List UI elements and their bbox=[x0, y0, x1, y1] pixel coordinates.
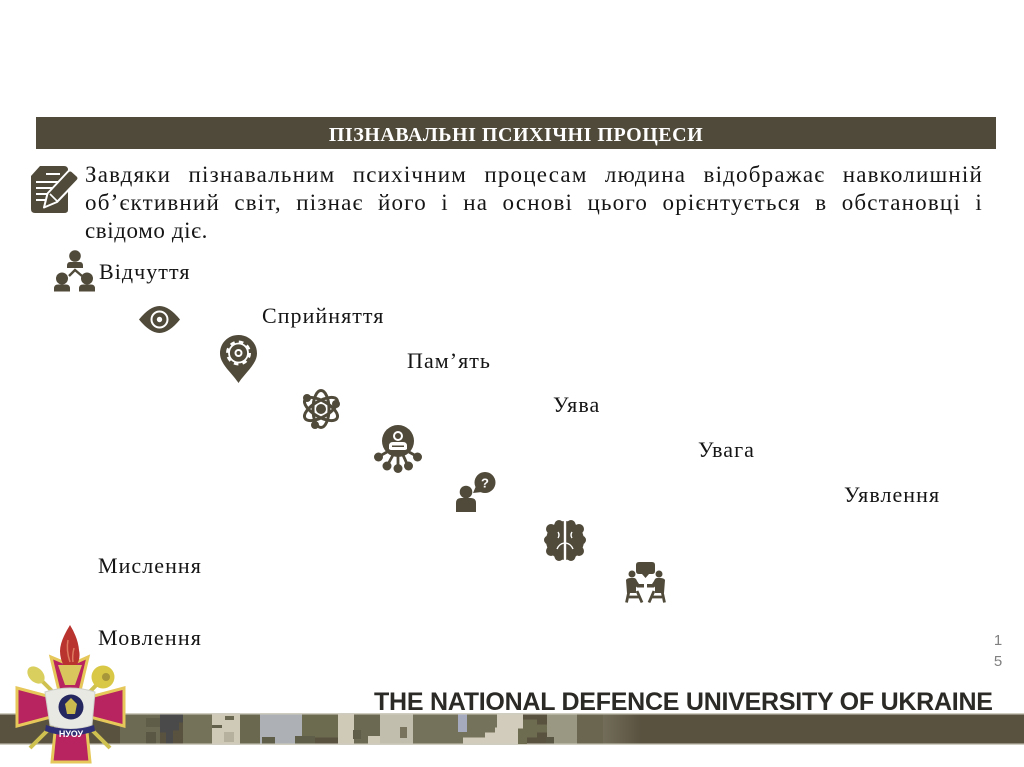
icon: eye bbox=[139, 306, 180, 333]
icon: people network bbox=[54, 250, 95, 292]
label: Уява: Уява bbox=[553, 392, 600, 417]
label: Мовлення: Мовлення bbox=[98, 625, 202, 650]
page number: 1 bbox=[994, 632, 1002, 649]
label: Уявлення: Уявлення bbox=[844, 482, 940, 507]
icon: location pin with gear bbox=[220, 335, 257, 383]
icon: two people talking bbox=[625, 562, 666, 603]
heading bar: ПІЗНАВАЛЬНІ ПСИХІЧНІ ПРОЦЕСИ bbox=[329, 124, 703, 146]
heading bar bbox=[36, 117, 996, 149]
label: Мислення: Мислення bbox=[98, 553, 202, 578]
icon: brain bbox=[544, 520, 586, 561]
intro text: об’єктивний світ, пізнає його і на основі цього орієнтується в обстановці і bbox=[85, 190, 983, 215]
footer band bbox=[0, 713, 1024, 745]
footer title: university name: THE NATIONAL DEFENCE UNIVERSITY OF UKRAINE bbox=[374, 688, 993, 716]
label: Сприйняття: Сприйняття bbox=[262, 303, 384, 328]
icon: atom bbox=[303, 389, 340, 429]
icon: person with question bubble bbox=[456, 472, 496, 512]
label: Відчуття: Відчуття bbox=[99, 259, 191, 284]
emblem: university cross bbox=[16, 625, 126, 764]
emblem: university cross: НУОУ bbox=[59, 729, 84, 739]
intro text bbox=[85, 162, 983, 243]
label: Увага: Увага bbox=[698, 437, 755, 462]
page number bbox=[994, 632, 1002, 670]
intro text: свідомо діє. bbox=[85, 218, 208, 243]
icon: document with pencil bbox=[31, 166, 78, 213]
icon: person with connections bbox=[374, 425, 422, 473]
label: Пам'ять: Пам’ять bbox=[407, 348, 491, 373]
icon: person with question bubble: ? bbox=[481, 476, 489, 490]
page number: 5 bbox=[994, 653, 1002, 670]
intro text: Завдяки пізнавальним психічним процесам людина відображає навколишній bbox=[85, 162, 983, 187]
